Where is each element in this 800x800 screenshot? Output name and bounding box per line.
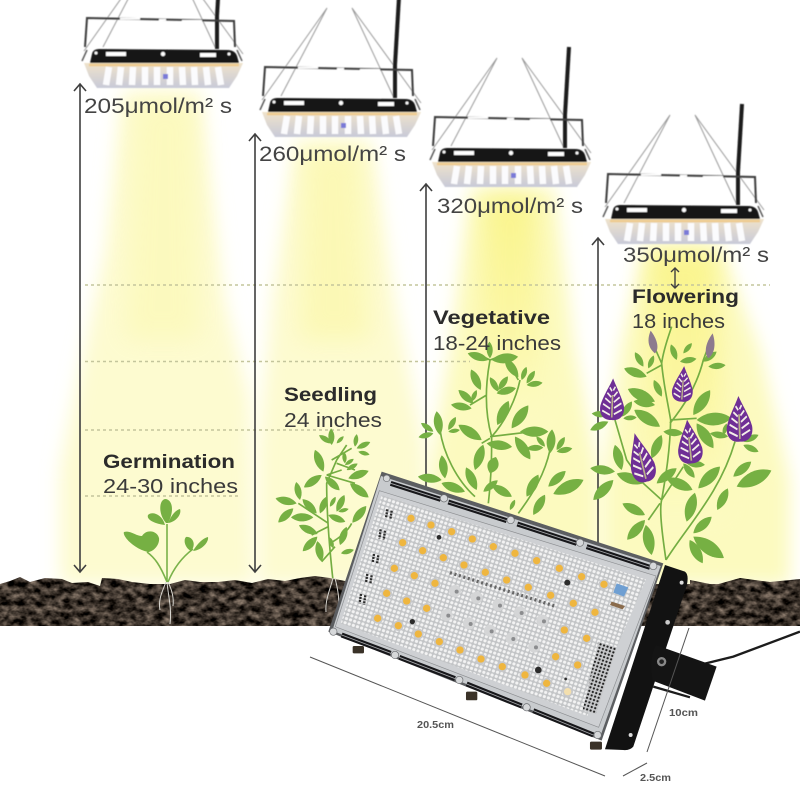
grow lamp 4 <box>603 104 764 244</box>
stage distance: 24-30 inches: 24-30 inches <box>103 476 238 498</box>
PPFD label 320: 320μmol/m² s <box>437 195 583 218</box>
grow lamp 1 <box>82 0 243 88</box>
LEDs: unlit centre <box>441 585 548 653</box>
plant: flowering <box>589 327 774 566</box>
flood light product photo <box>328 472 800 750</box>
dot matrix block <box>583 642 617 714</box>
arrow: seedling distance <box>249 134 261 572</box>
stage distance: 18 inches: 18 inches <box>632 311 725 333</box>
stage heading: Vegetative: Vegetative <box>433 308 550 329</box>
dimension line: width <box>647 628 689 752</box>
stage heading: Seedling: Seedling <box>284 385 377 406</box>
stage heading: Germination: Germination <box>103 452 235 473</box>
flood light feet <box>353 646 602 750</box>
PPFD label 350: 350μmol/m² s <box>623 244 769 267</box>
printed marks <box>450 573 557 607</box>
arrow: vegetative distance <box>420 184 432 500</box>
PPFD label 205: 205μmol/m² s <box>84 95 232 118</box>
dimension line: depth <box>623 763 647 776</box>
left component marks <box>360 509 570 680</box>
stage heading: Flowering: Flowering <box>632 287 739 308</box>
grow lamp 2 <box>260 0 421 137</box>
lens bezel <box>332 476 661 737</box>
flood light cable <box>653 632 800 697</box>
plant: germination sprout <box>124 499 208 582</box>
LED circuit board <box>341 495 646 716</box>
light beam: seedling <box>258 140 425 585</box>
dimension label: 20.5cm: 20.5cm <box>417 719 454 731</box>
arrow: flowering distance <box>592 238 604 545</box>
stage distance: 24 inches: 24 inches <box>284 410 382 432</box>
mounting bracket <box>651 645 717 701</box>
stage distance: 18-24 inches: 18-24 inches <box>433 333 561 355</box>
bezel inner edge <box>335 491 656 727</box>
frame bolts <box>330 475 657 739</box>
dotted height guides <box>85 285 770 496</box>
flood light back plate <box>605 565 688 750</box>
LEDs: rows 3 to 5, warm <box>372 563 592 697</box>
blue components <box>613 583 628 597</box>
dimension label: 2.5cm: 2.5cm <box>640 772 671 784</box>
arrow: germination distance <box>74 84 86 572</box>
plant: seedling <box>275 428 371 583</box>
plant: vegetative <box>417 342 586 517</box>
frame black strips <box>342 483 650 735</box>
light beam: germination <box>60 92 255 585</box>
arrow: flowering short gap <box>671 268 679 288</box>
PPFD label 260: 260μmol/m² s <box>259 143 406 166</box>
grow lamp 3 <box>430 47 591 187</box>
light beam: vegetative <box>428 188 600 585</box>
roots <box>159 578 339 624</box>
flood light frame <box>328 472 663 741</box>
light beam: flowering <box>602 245 790 585</box>
dimension line: length <box>310 657 605 776</box>
dimension label: 10cm: 10cm <box>669 707 698 719</box>
soil band <box>0 576 800 626</box>
LEDs: row 1 and 2 <box>397 513 609 618</box>
